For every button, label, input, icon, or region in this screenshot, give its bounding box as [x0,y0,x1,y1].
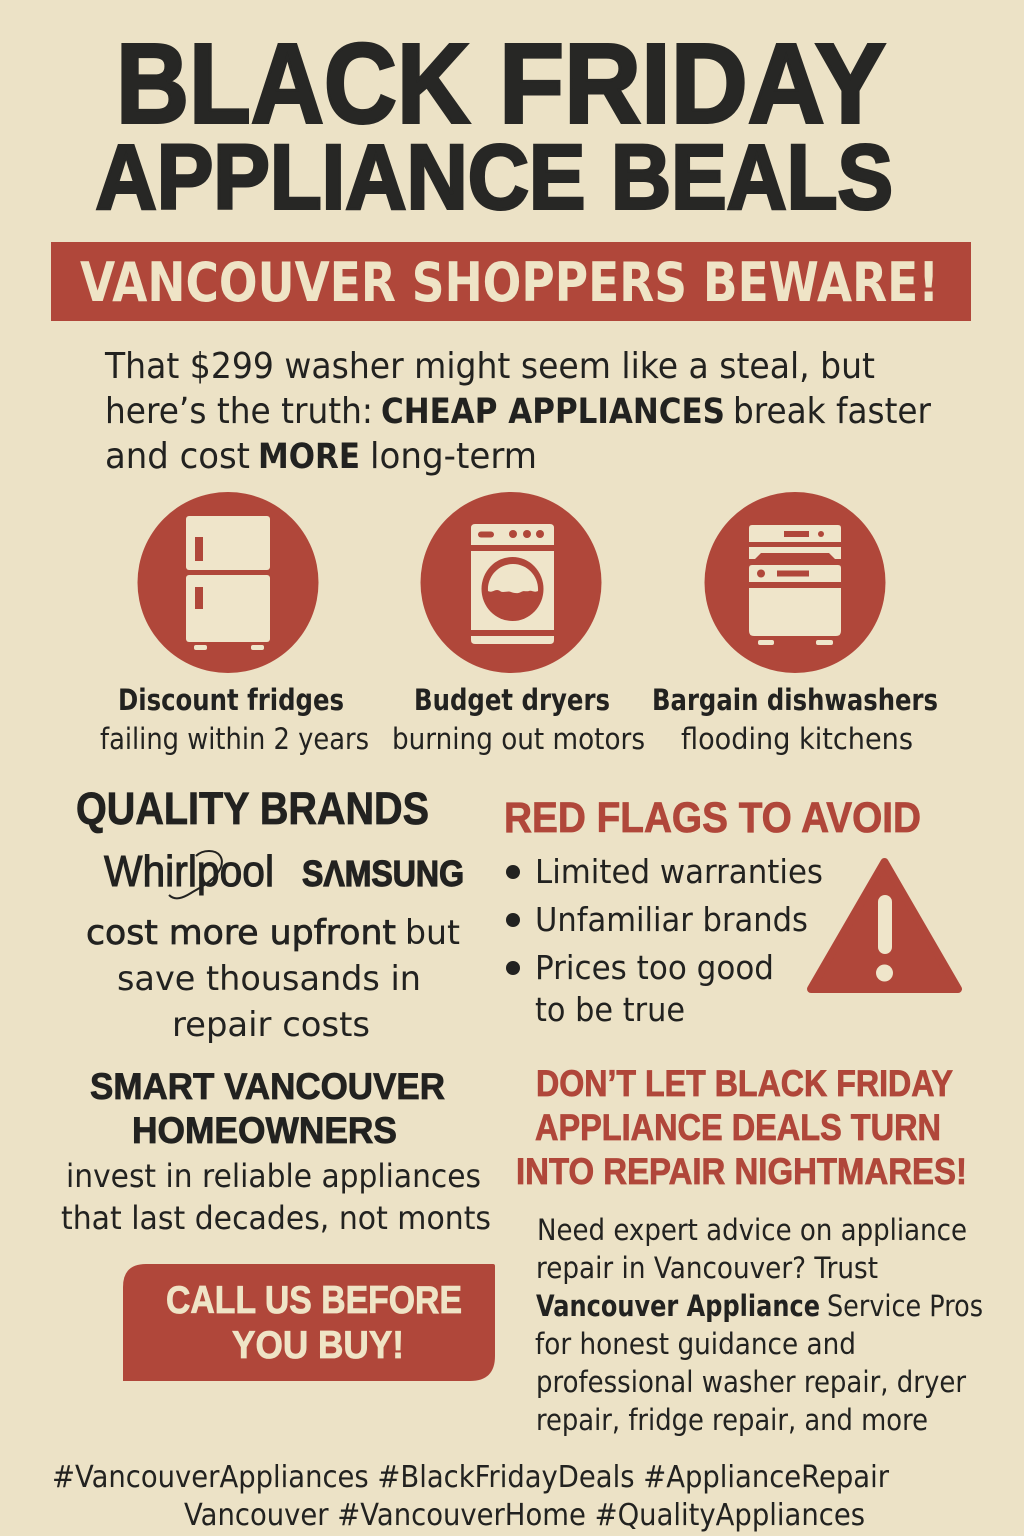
title [96,20,893,229]
panel: warning headline [516,1063,967,1192]
panel: quality brands [76,783,464,1045]
icon: warning triangle [811,862,958,989]
button: call us before you buy: YOU BUY! [232,1324,404,1367]
caption: dryers: Budget dryers [414,683,610,717]
panel: warning headline: INTO REPAIR NIGHTMARES! [516,1151,967,1192]
intro text block: MORE [258,437,360,477]
panel: smart homeowners: HOMEOWNERS [132,1110,397,1151]
caption: fridges: failing within 2 years [100,722,369,756]
logo: Samsung: SΛMSUNG [302,853,464,894]
intro text block: break faster [733,391,931,432]
text block: expert advice: repair, fridge repair, and more [536,1403,928,1437]
intro text block [104,346,931,477]
panel: smart homeowners [61,1066,491,1237]
hashtags [52,1460,890,1533]
hashtags: #VancouverAppliances #BlackFridayDeals #ApplianceRepair [52,1460,890,1495]
text block: expert advice: Service Pros [827,1289,983,1323]
panel: red flags [504,794,958,1029]
panel: warning headline: APPLIANCE DEALS TURN [535,1107,941,1148]
caption: fridges: Discount fridges [118,683,344,717]
panel: warning headline: DON’T LET BLACK FRIDAY [536,1063,953,1104]
intro text block: long-term [370,436,537,477]
heading: quality brands: QUALITY BRANDS [76,783,429,834]
heading: red flags: RED FLAGS TO AVOID [504,794,921,842]
caption: dryers [392,683,645,756]
caption: dishwashers: Bargain dishwashers [652,683,938,717]
logo: Whirlpool: Whirlpool [104,847,274,896]
text block: expert advice: Need expert advice on appliance [537,1213,967,1247]
title: BEALS [611,127,893,229]
icon: fridge [138,492,318,673]
caption: dishwashers: flooding kitchens [681,722,913,756]
caption: fridges [100,683,369,756]
icon: washer / dryer [420,492,602,673]
text block: expert advice: Vancouver Appliance [536,1289,820,1323]
text block: expert advice: professional washer repair, dryer [536,1365,966,1399]
text: cost more upfront [86,913,460,1045]
list: red flags: Prices too good [535,948,774,987]
caption: dishwashers [652,683,938,756]
title: APPLIANCE [96,127,586,229]
panel: smart homeowners: SMART VANCOUVER [90,1066,445,1107]
button: call us before you buy: CALL US BEFORE [166,1279,462,1322]
panel: smart homeowners: that last decades, not monts [61,1199,491,1237]
text block: expert advice: repair in Vancouver? Trust [536,1251,878,1285]
text block: expert advice [535,1213,983,1437]
intro text block: here’s the truth: [105,391,373,432]
list: red flags: Limited warranties [535,852,823,891]
list: red flags: Unfamiliar brands [535,900,808,939]
title: FRIDAY [499,20,886,146]
intro text block: and cost [105,436,250,477]
intro text block: CHEAP APPLIANCES [381,392,725,432]
text: cost more upfront: but [405,913,460,953]
title: BLACK [116,20,470,146]
icon: dishwasher [704,492,886,673]
hashtags: Vancouver #VancouverHome #QualityAppliances [184,1498,865,1533]
text block: expert advice: for honest guidance and [535,1327,856,1361]
list: red flags [506,852,823,1029]
text: cost more upfront: cost more upfront [86,913,396,953]
list: red flags: to be true [535,990,685,1029]
button: call us before you buy [123,1264,495,1381]
text: cost more upfront: repair costs [172,1005,370,1045]
panel: smart homeowners: invest in reliable appliances [66,1157,481,1195]
text: cost more upfront: save thousands in [117,959,421,999]
caption: dryers: burning out motors [392,722,645,756]
intro text block: That $299 washer might seem like a steal, but [104,346,875,387]
